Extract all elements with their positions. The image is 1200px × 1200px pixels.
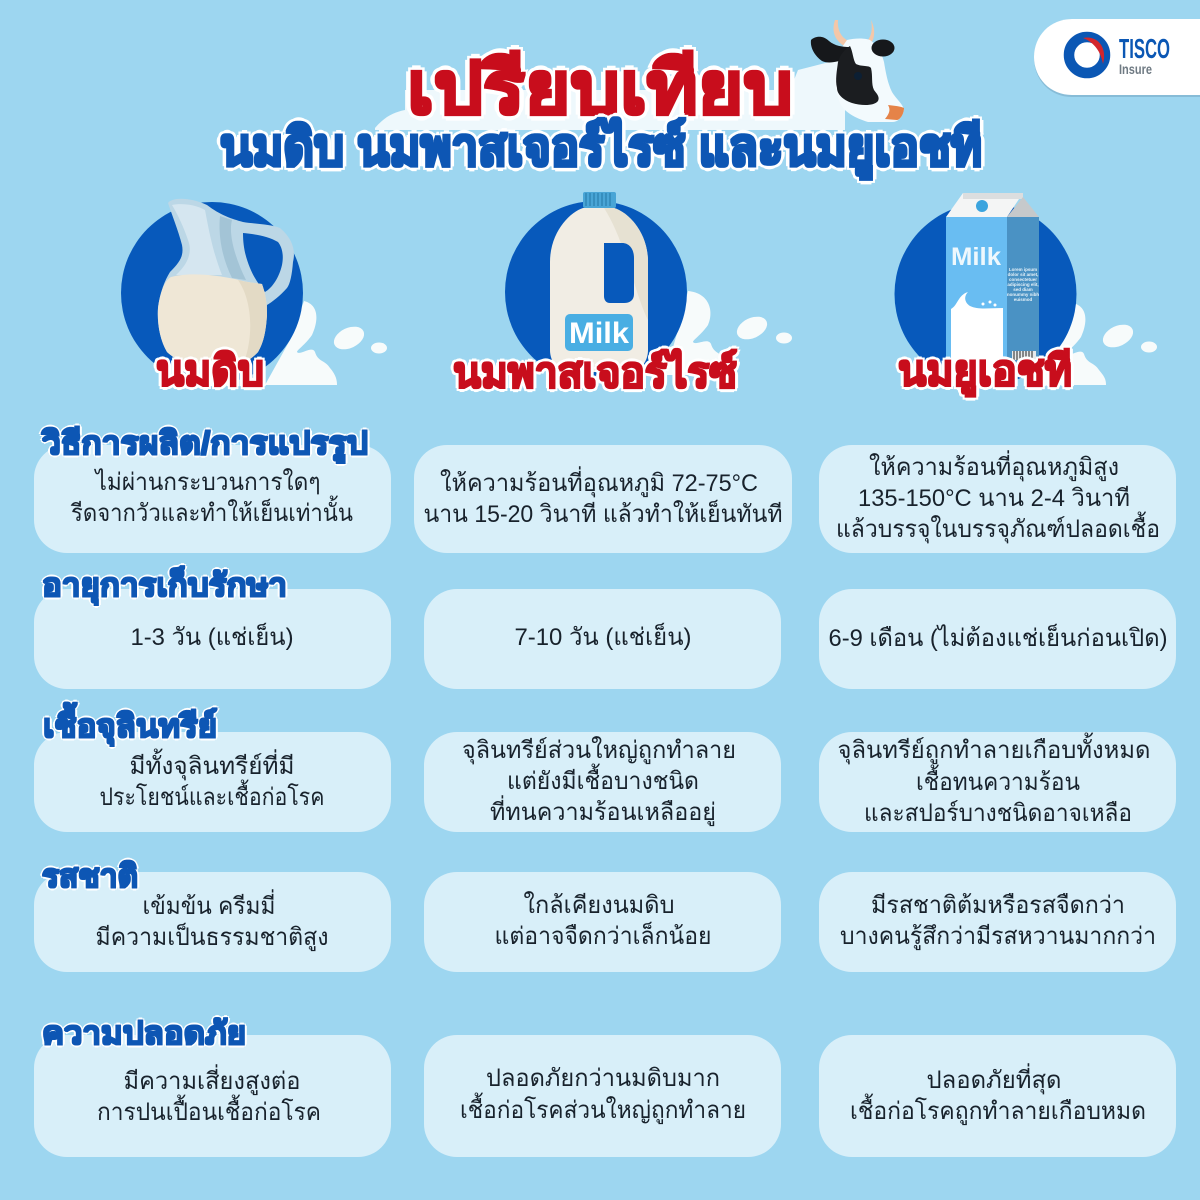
heading: taste: รสชาติ	[44, 856, 140, 892]
label: raw milk: นมดิบ	[156, 343, 264, 390]
panel: taste	[34, 855, 1176, 972]
cell: UHT microbes	[819, 732, 1176, 832]
heading: microorganisms: เชื้อจุลินทรีย์	[43, 699, 217, 744]
label: UHT milk: นมยูเอชที	[895, 350, 1069, 400]
icon: cow	[375, 20, 904, 130]
icon: milk carton	[946, 193, 1039, 375]
title line 2: นมดิบ นมพาสเจอร์ไรซ์ และนมยูเอชที	[216, 120, 978, 184]
heading: microorganisms: เชื้อจุลินทรีย์	[41, 704, 215, 749]
icon: milk splash	[665, 291, 792, 375]
cell: raw milk microbes: ประโยชน์และเชื้อก่อโรค	[100, 779, 324, 811]
cell: pasteurized safety: ปลอดภัยกว่านมดิบมาก	[486, 1065, 720, 1092]
label: pasteurized milk: นมพาสเจอร์ไรซ์	[450, 345, 734, 393]
heading: production method: วิธีการผลิต/การแปรรูป	[38, 425, 365, 464]
heading: safety: ความปลอดภัย	[40, 1017, 244, 1053]
icon: milk jug	[158, 199, 294, 368]
cell: pasteurized microbes: จุลินทรีย์ส่วนใหญ่ถูกทำลาย	[462, 736, 736, 765]
title line 1: เปรียบเทียบ	[403, 53, 789, 133]
heading: taste: รสชาติ	[45, 858, 141, 894]
cell: UHT process: 135-150°C นาน 2-4 วินาที	[858, 485, 1130, 512]
label: raw milk: นมดิบ	[160, 347, 268, 394]
column header: raw milk	[121, 199, 387, 398]
title line 1: เปรียบเทียบ	[407, 55, 793, 135]
label: pasteurized milk: นมพาสเจอร์ไรซ์	[453, 348, 737, 396]
heading: microorganisms: เชื้อจุลินทรีย์	[40, 702, 214, 747]
cell: raw milk safety	[34, 1035, 391, 1157]
heading: microorganisms: เชื้อจุลินทรีย์	[46, 702, 220, 747]
heading: microorganisms: เชื้อจุลินทรีย์	[45, 700, 219, 745]
cell: raw milk microbes	[34, 732, 391, 832]
label: UHT milk: นมยูเอชที	[898, 343, 1072, 393]
label: raw milk: นมดิบ	[159, 344, 267, 391]
cell: UHT process: ให้ความร้อนที่อุณหภูมิสูง	[869, 450, 1119, 482]
heading: production method: วิธีการผลิต/การแปรรูป	[41, 422, 368, 461]
title line 1: เปรียบเทียบ	[407, 49, 793, 129]
icon: milk carton: dolor sit amet,	[1008, 272, 1038, 277]
panel: production method	[34, 422, 1176, 553]
title line 1: เปรียบเทียบ	[411, 53, 797, 133]
heading: safety: ความปลอดภัย	[42, 1018, 246, 1054]
column header: pasteurized milk	[449, 192, 792, 400]
label: UHT milk: นมยูเอชที	[898, 347, 1072, 397]
cell: raw milk taste	[34, 872, 391, 972]
label: UHT milk: นมยูเอชที	[901, 350, 1075, 400]
heading: shelf life: อายุการเก็บรักษา	[39, 565, 284, 606]
label: pasteurized milk: นมพาสเจอร์ไรซ์	[456, 345, 740, 393]
icon: milk carton: euismod	[1014, 297, 1032, 302]
cell: pasteurized taste	[424, 872, 781, 972]
label: raw milk: นมดิบ	[156, 351, 264, 398]
blue circle	[894, 203, 1076, 385]
cell: raw milk process: ไม่ผ่านกระบวนการใดๆ	[94, 468, 320, 496]
heading: shelf life: อายุการเก็บรักษา	[42, 565, 287, 606]
title line 2: นมดิบ นมพาสเจอร์ไรซ์ และนมยูเอชที	[224, 120, 986, 184]
label: pasteurized milk: นมพาสเจอร์ไรซ์	[453, 344, 737, 392]
title line 2: นมดิบ นมพาสเจอร์ไรซ์ และนมยูเอชที	[225, 117, 987, 180]
label: raw milk: นมดิบ	[153, 344, 261, 391]
heading: safety: ความปลอดภัย	[42, 1015, 246, 1051]
heading: safety: ความปลอดภัย	[39, 1015, 243, 1051]
heading: microorganisms: เชื้อจุลินทรีย์	[41, 700, 215, 745]
cell: UHT microbes: และสปอร์บางชนิดอาจเหลือ	[864, 799, 1132, 827]
heading: shelf life: อายุการเก็บรักษา	[40, 563, 285, 604]
column header: UHT milk	[894, 193, 1157, 401]
icon: milk carton: adipiscing elit,	[1007, 282, 1039, 287]
cell: raw milk shelf life: 1-3 วัน (แช่เย็น)	[130, 622, 294, 651]
cell: raw milk shelf life	[34, 589, 391, 689]
heading: production method: วิธีการผลิต/การแปรรูป	[39, 423, 366, 462]
cell: UHT safety	[819, 1035, 1176, 1157]
heading: microorganisms: เชื้อจุลินทรีย์	[43, 705, 217, 750]
heading: shelf life: อายุการเก็บรักษา	[44, 563, 289, 604]
heading: taste: รสชาติ	[44, 860, 140, 896]
heading: safety: ความปลอดภัย	[44, 1017, 248, 1053]
heading: shelf life: อายุการเก็บรักษา	[44, 567, 289, 608]
cell: UHT process: แล้วบรรจุในบรรจุภัณฑ์ปลอดเชื้อ	[836, 511, 1160, 544]
heading: production method: วิธีการผลิต/การแปรรูป	[41, 428, 368, 467]
label: pasteurized milk: นมพาสเจอร์ไรซ์	[457, 348, 741, 396]
icon: milk splash	[265, 301, 387, 385]
title line 1: เปรียบเทียบ	[411, 45, 797, 125]
label: pasteurized milk: นมพาสเจอร์ไรซ์	[456, 351, 740, 399]
label: pasteurized milk: นมพาสเจอร์ไรซ์	[449, 348, 733, 396]
cell: raw milk taste: มีความเป็นธรรมชาติสูง	[96, 922, 328, 952]
cell: UHT safety: เชื้อก่อโรคถูกทำลายเกือบหมด	[850, 1093, 1146, 1126]
heading: shelf life: อายุการเก็บรักษา	[42, 562, 287, 603]
cell: UHT shelf life: 6-9 เดือน (ไม่ต้องแช่เย็นก่อนเปิด)	[828, 623, 1168, 652]
panel: shelf life	[34, 562, 1176, 689]
cell: UHT microbes: จุลินทรีย์ถูกทำลายเกือบทั้งหมด	[838, 732, 1150, 765]
logo: TISCO Insure: Insure	[1119, 61, 1152, 77]
title line 2: นมดิบ นมพาสเจอร์ไรซ์ และนมยูเอชที	[220, 112, 982, 175]
cell: pasteurized process: ให้ความร้อนที่อุณหภูมิ 72-75°C	[440, 466, 758, 498]
label: raw milk: นมดิบ	[156, 347, 264, 394]
icon: milk carton: Milk	[951, 243, 1001, 271]
heading: production method: วิธีการผลิต/การแปรรูป	[43, 423, 370, 462]
cell: raw milk safety: มีความเสี่ยงสูงต่อ	[124, 1064, 300, 1096]
label: UHT milk: นมยูเอชที	[895, 344, 1069, 394]
cell: pasteurized microbes: ที่ทนความร้อนเหลืออยู่	[490, 795, 716, 827]
icon: milk bottle: Milk	[569, 317, 629, 350]
cell: pasteurized safety: เชื้อก่อโรคส่วนใหญ่ถูกทำลาย	[460, 1092, 746, 1125]
icon: milk splash	[1034, 303, 1157, 385]
heading: safety: ความปลอดภัย	[45, 1015, 249, 1051]
icon: milk carton: sed diam	[1013, 287, 1033, 292]
label: UHT milk: นมยูเอชที	[894, 347, 1068, 397]
label: raw milk: นมดิบ	[152, 347, 260, 394]
cell: pasteurized process	[414, 445, 792, 553]
title line 2: นมดิบ นมพาสเจอร์ไรซ์ และนมยูเอชที	[220, 122, 982, 185]
heading: safety: ความปลอดภัย	[44, 1013, 248, 1049]
cell: UHT microbes: เชื้อทนความร้อน	[916, 764, 1080, 796]
label: pasteurized milk: นมพาสเจอร์ไรซ์	[450, 351, 734, 399]
label: raw milk: นมดิบ	[153, 350, 261, 397]
heading: taste: รสชาติ	[42, 861, 138, 897]
cell: UHT process	[819, 445, 1176, 553]
title line 2: นมดิบ นมพาสเจอร์ไรซ์ และนมยูเอชที	[216, 114, 978, 176]
title line 1: เปรียบเทียบ	[407, 43, 793, 123]
label: UHT milk: นมยูเอชที	[898, 351, 1072, 401]
title line 2: นมดิบ นมพาสเจอร์ไรซ์ และนมยูเอชที	[220, 117, 982, 180]
cell: raw milk process	[34, 445, 391, 553]
cell: pasteurized process: นาน 15-20 วินาที แล้วทำให้เย็นทันที	[424, 499, 782, 528]
cell: UHT safety: ปลอดภัยที่สุด	[926, 1063, 1062, 1095]
title line 2: นมดิบ นมพาสเจอร์ไรซ์ และนมยูเอชที	[215, 117, 977, 180]
icon: milk carton: nonummy nibh	[1007, 292, 1039, 297]
cell: UHT shelf life	[819, 589, 1176, 689]
heading: taste: รสชาติ	[40, 860, 136, 896]
heading: taste: รสชาติ	[42, 855, 138, 891]
cell: pasteurized shelf life: 7-10 วัน (แช่เย็น)	[514, 622, 692, 651]
heading: taste: รสชาติ	[39, 858, 135, 894]
cell: pasteurized shelf life	[424, 589, 781, 689]
heading: safety: ความปลอดภัย	[40, 1013, 244, 1049]
cell: raw milk safety: การปนเปื้อนเชื้อก่อโรค	[97, 1094, 321, 1126]
heading: microorganisms	[40, 699, 220, 750]
cell: raw milk microbes: มีทั้งจุลินทรีย์ที่มี	[130, 748, 294, 781]
title line 2: นมดิบ นมพาสเจอร์ไรซ์ และนมยูเอชที	[224, 114, 986, 176]
heading: production method: วิธีการผลิต/การแปรรูป	[43, 427, 370, 466]
cell: pasteurized taste: ใกล้เคียงนมดิบ	[524, 891, 674, 919]
title line 1: เปรียบเทียบ	[413, 49, 799, 129]
cell: UHT taste	[819, 872, 1176, 972]
title line 1: เปรียบเทียบ	[401, 49, 787, 129]
heading: taste: รสชาติ	[40, 856, 136, 892]
heading: production method: วิธีการผลิต/การแปรรูป	[44, 425, 371, 464]
heading: shelf life: อายุการเก็บรักษา	[42, 568, 287, 609]
blue circle	[505, 201, 687, 383]
icon: milk carton: consectetuer	[1009, 277, 1037, 282]
blue circle	[121, 202, 303, 384]
heading: shelf life: อายุการเก็บรักษา	[40, 567, 285, 608]
heading: microorganisms: เชื้อจุลินทรีย์	[43, 702, 217, 747]
cell: UHT taste: มีรสชาติต้มหรือรสจืดกว่า	[871, 892, 1125, 919]
cell: raw milk process: รีดจากวัวและทำให้เย็นเท่านั้น	[70, 495, 353, 527]
panel: safety	[34, 1012, 1176, 1157]
label: UHT milk: นมยูเอชที	[902, 347, 1076, 397]
label: pasteurized milk: นมพาสเจอร์ไรซ์	[453, 352, 737, 400]
label: UHT milk: นมยูเอชที	[901, 344, 1075, 394]
heading: production method: วิธีการผลิต/การแปรรูป	[41, 425, 368, 464]
title	[215, 43, 987, 185]
cell: pasteurized microbes: แต่ยังมีเชื้อบางชนิด	[507, 763, 699, 795]
title line 1: เปรียบเทียบ	[403, 45, 789, 125]
heading: production method: วิธีการผลิต/การแปรรูป	[39, 427, 366, 466]
panel: microorganisms	[34, 699, 1176, 832]
cell: pasteurized safety	[424, 1035, 781, 1157]
heading: taste: รสชาติ	[42, 858, 138, 894]
heading: safety: ความปลอดภัย	[42, 1012, 246, 1048]
logo: TISCO Insure	[1034, 19, 1200, 97]
icon: milk bottle	[550, 192, 648, 372]
heading: microorganisms: เชื้อจุลินทรีย์	[45, 704, 219, 749]
heading: shelf life: อายุการเก็บรักษา	[45, 565, 290, 606]
cell: pasteurized microbes	[424, 732, 781, 832]
cell: pasteurized taste: แต่อาจจืดกว่าเล็กน้อย	[494, 921, 712, 950]
label: raw milk: นมดิบ	[159, 350, 267, 397]
cell: raw milk taste: เข้มข้น ครีมมี่	[142, 889, 276, 920]
icon: milk carton: Lorem ipsum	[1009, 267, 1037, 272]
cell: UHT taste: บางคนรู้สึกว่ามีรสหวานมากกว่า	[840, 923, 1156, 951]
